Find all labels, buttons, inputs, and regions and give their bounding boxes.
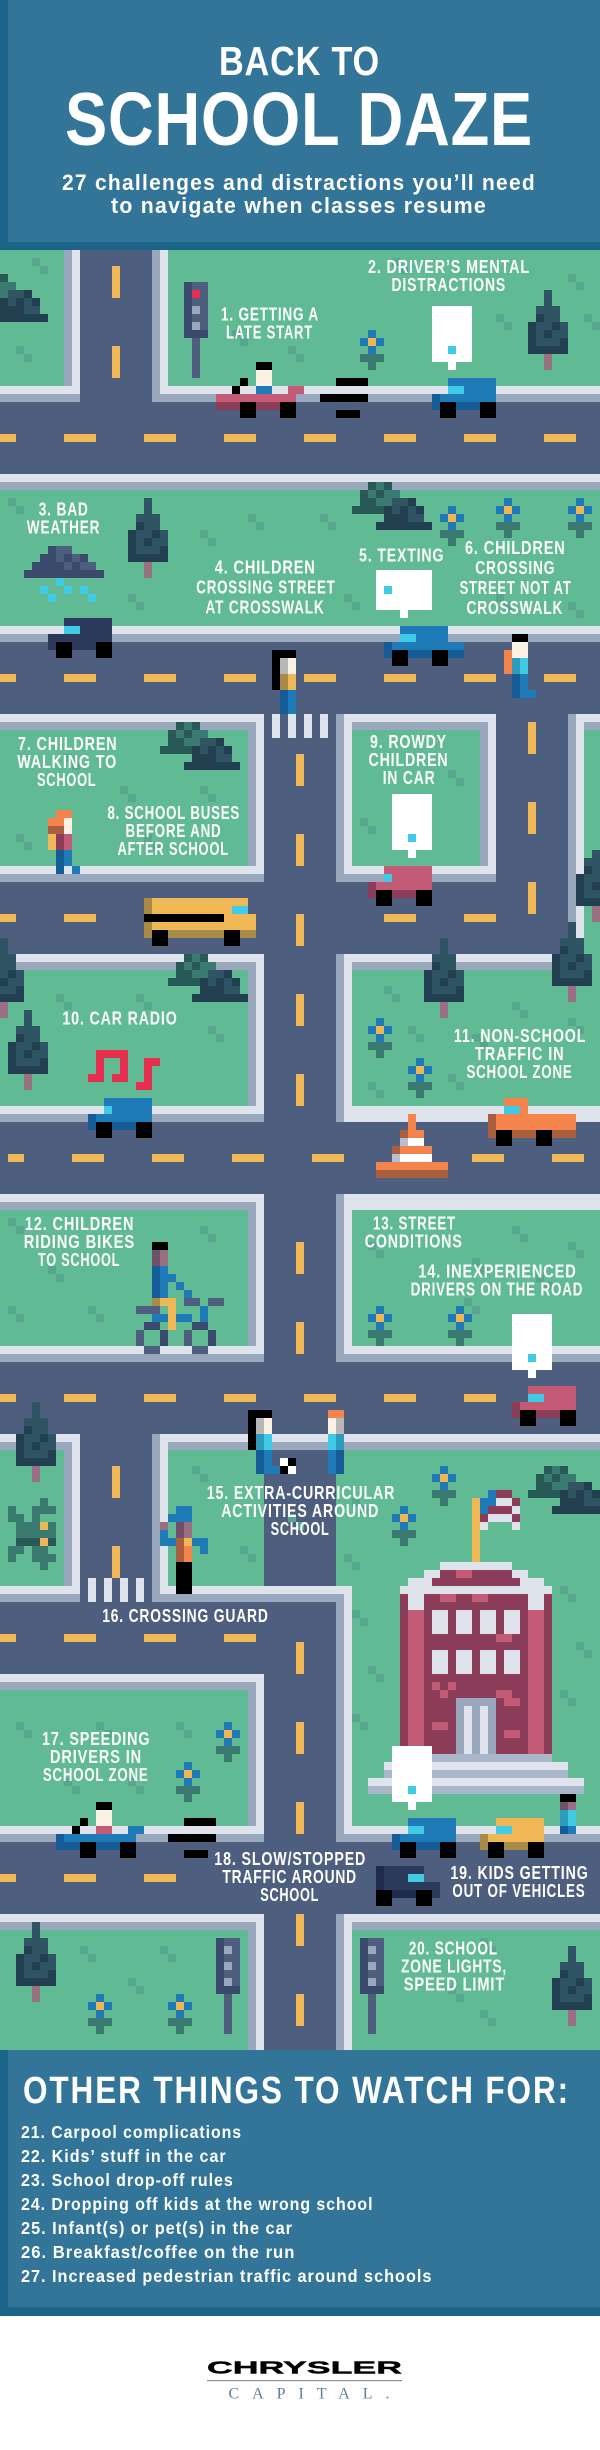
icon: blue car at school	[392, 1818, 456, 1858]
thought bubble	[392, 794, 432, 858]
label 18: 18. SLOW/STOPPED	[214, 1849, 366, 1869]
label 4	[196, 558, 336, 618]
label 3: WEATHER	[27, 518, 100, 538]
label 18: SCHOOL	[260, 1885, 319, 1905]
logo: Chrysler Capital	[207, 2358, 403, 2403]
crosswalk near school	[88, 1578, 144, 1602]
label 7	[17, 734, 118, 790]
icon: child riding bike	[136, 1242, 224, 1354]
bubble dot	[408, 834, 416, 842]
label 15: 15. EXTRA-CURRICULAR	[207, 1483, 395, 1503]
roads	[0, 250, 600, 2058]
label 4: AT CROSSWALK	[206, 598, 324, 618]
label 3: 3. BAD	[39, 500, 89, 520]
icon: speeding red car with driver	[216, 362, 304, 418]
label 4: CROSSING STREET	[196, 578, 336, 598]
list of items 21 to 27: 21. Carpool complications	[21, 2122, 242, 2142]
icon: child with soccer ball	[248, 1410, 296, 1474]
logo: Chrysler Capital: CAPITAL.	[228, 2386, 390, 2403]
title	[65, 38, 533, 161]
panel: other things to watch for	[0, 2050, 600, 2316]
icon: child getting out of vehicle	[560, 1794, 576, 1834]
icon: child at crosswalk	[272, 650, 296, 714]
thought bubble	[432, 306, 472, 370]
list of items 21 to 27: 25. Infant(s) or pet(s) in the car	[21, 2218, 293, 2238]
label 1: 1. GETTING A	[221, 304, 319, 324]
icon: music notes	[88, 1050, 160, 1090]
label 2	[368, 257, 530, 295]
label 5: 5. TEXTING	[359, 546, 444, 566]
icon: blue car	[432, 378, 496, 418]
label 12: 12. CHILDREN	[25, 1214, 134, 1234]
icon: yellow car at school	[480, 1818, 544, 1858]
label 6	[460, 538, 572, 618]
label 17	[42, 1729, 150, 1785]
crosswalk	[272, 714, 328, 738]
map background	[0, 250, 600, 2050]
label 8: AFTER SCHOOL	[118, 839, 229, 859]
bushes	[0, 274, 600, 1514]
icon: storm cloud	[24, 546, 104, 602]
sidewalk curbs light	[0, 250, 600, 2058]
icon: crossing guard	[160, 1506, 208, 1594]
label 20: SPEED LIMIT	[404, 1974, 505, 1994]
school bricks	[432, 1570, 520, 1738]
road lane markings	[0, 266, 584, 2026]
pine trees	[0, 290, 600, 2026]
subtitle: to navigate when classes resume	[111, 193, 487, 218]
speed lines	[320, 378, 368, 418]
label 13: 13. STREET	[373, 1214, 456, 1234]
label 17: SCHOOL ZONE	[43, 1765, 148, 1785]
label 18	[214, 1849, 366, 1905]
thought bubble	[512, 1314, 552, 1378]
flowers	[88, 330, 592, 2034]
label 8: BEFORE AND	[126, 821, 222, 841]
icon: school zone traffic light left	[216, 1938, 240, 2034]
label 8	[108, 803, 240, 859]
icon: speeding blue car	[56, 1802, 144, 1858]
school door	[456, 1698, 496, 1754]
icon: school zone traffic light right	[360, 1938, 384, 2034]
icon: blue sedan	[384, 626, 464, 666]
label 9: CHILDREN	[368, 750, 448, 770]
icon: red car with rowdy children	[368, 866, 432, 906]
icon: orange pickup truck	[488, 1098, 576, 1146]
label 14	[411, 1262, 583, 1300]
school walls	[400, 1570, 552, 1754]
icon: traffic cone	[376, 1114, 448, 1178]
icon: child with orange hair	[328, 1410, 344, 1474]
icon: traffic light with red signal	[184, 282, 208, 378]
list of items 21 to 27: 22. Kids’ stuff in the car	[21, 2146, 227, 2166]
icon: overgrown shrub	[8, 1498, 56, 1570]
label 12: TO SCHOOL	[38, 1250, 120, 1270]
thought bubble	[392, 1746, 432, 1810]
label 19	[450, 1863, 589, 1901]
icon: school bus	[144, 898, 256, 946]
label 9: IN CAR	[383, 768, 436, 788]
label 7: SCHOOL	[37, 770, 96, 790]
title: BACK TO	[219, 38, 380, 84]
bubble dot	[448, 346, 456, 354]
school roof	[400, 1562, 552, 1610]
label 10: 10. CAR RADIO	[62, 1008, 178, 1028]
label 7: WALKING TO	[17, 752, 117, 772]
label 17: 17. SPEEDING	[42, 1729, 150, 1749]
school windows	[432, 1610, 520, 1674]
header panel	[0, 0, 600, 250]
label 17: DRIVERS IN	[50, 1747, 142, 1767]
list of items 21 to 27: 27. Increased pedestrian traffic around schools	[21, 2266, 432, 2286]
street map	[0, 250, 600, 2058]
icon: blue car with radio	[88, 1098, 152, 1138]
icon: child jaywalking with backpack	[504, 634, 536, 698]
icon: red car inexperienced driver	[512, 1386, 576, 1426]
label 11	[454, 1026, 586, 1082]
label 8: 8. SCHOOL BUSES	[108, 803, 240, 823]
label 3	[27, 500, 100, 538]
label 7: 7. CHILDREN	[18, 734, 118, 754]
label 6: CROSSING	[475, 558, 555, 578]
bubble dot	[384, 586, 392, 594]
subtitle	[62, 170, 536, 218]
label 15: SCHOOL	[271, 1519, 330, 1539]
label 12	[24, 1214, 135, 1270]
bubble dot	[408, 1786, 416, 1794]
label 9: 9. ROWDY	[370, 732, 447, 752]
bubble dot	[528, 1354, 536, 1362]
label 15	[207, 1483, 395, 1539]
label 6: 6. CHILDREN	[465, 538, 566, 558]
label 12: RIDING BIKES	[24, 1232, 135, 1252]
list of items 21 to 27	[21, 2122, 432, 2286]
label 15: ACTIVITIES AROUND	[221, 1501, 379, 1521]
label 1: LATE START	[226, 322, 313, 342]
label 4: 4. CHILDREN	[215, 558, 316, 578]
label 9	[368, 732, 448, 788]
list of items 21 to 27: 24. Dropping off kids at the wrong school	[21, 2194, 374, 2214]
school steps	[368, 1754, 584, 1794]
icon: school flag	[472, 1490, 520, 1562]
icon: dark car stopped	[376, 1866, 440, 1906]
school building	[368, 1562, 584, 1794]
label 13: CONDITIONS	[365, 1232, 463, 1252]
label 2: DISTRACTIONS	[392, 275, 506, 295]
grass specks	[8, 258, 600, 2026]
list of items 21 to 27: 26. Breakfast/coffee on the run	[21, 2242, 295, 2262]
list of items 21 to 27: 23. School drop-off rules	[21, 2170, 234, 2190]
label 20	[401, 1938, 507, 1994]
icon: child walking to school	[48, 810, 80, 874]
label 18: TRAFFIC AROUND	[222, 1867, 357, 1887]
icon: dark car	[48, 618, 112, 658]
school columns	[408, 1610, 544, 1754]
label 1	[221, 304, 319, 342]
text bubble	[376, 570, 432, 618]
subtitle: 27 challenges and distractions you’ll need	[62, 170, 536, 195]
label 11: TRAFFIC IN	[475, 1044, 564, 1064]
sidewalk curbs shadow	[0, 250, 600, 2058]
label 20: 20. SCHOOL	[409, 1938, 498, 1958]
speed lines	[168, 1818, 216, 1858]
label 16: 16. CROSSING GUARD	[102, 1606, 269, 1626]
logo: Chrysler Capital: CHRYSLER	[207, 2358, 403, 2378]
label 20: ZONE LIGHTS,	[401, 1956, 507, 1976]
label 2: 2. DRIVER’S MENTAL	[368, 257, 530, 277]
label 6: CROSSWALK	[466, 598, 563, 618]
label 13	[365, 1214, 463, 1252]
